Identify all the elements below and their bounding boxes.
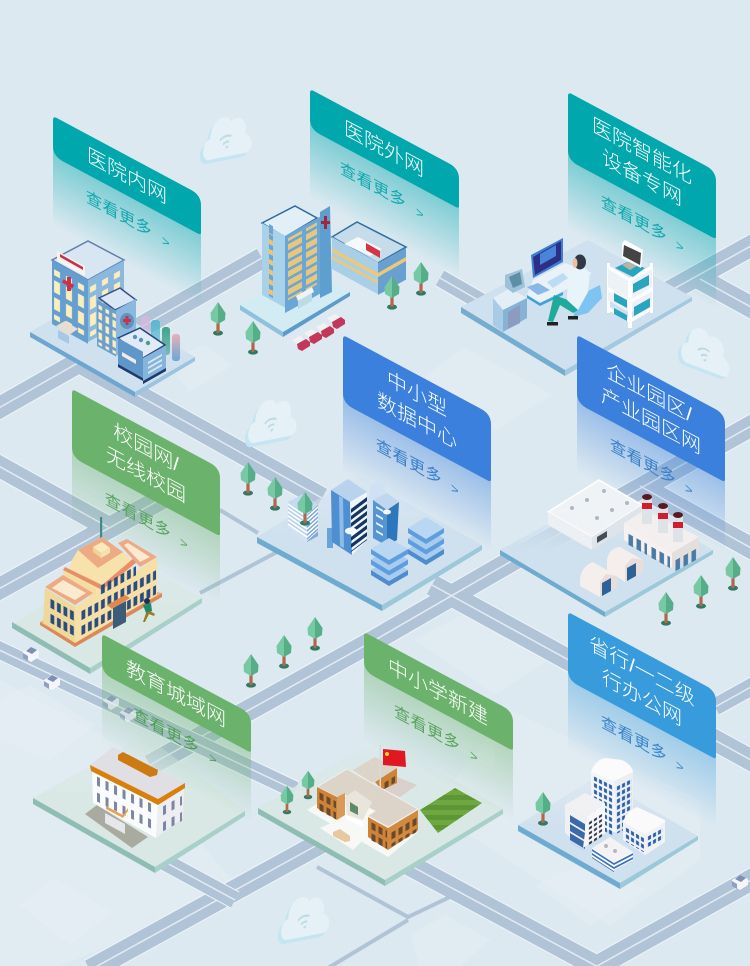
white base xyxy=(307,790,418,857)
tree xyxy=(298,492,312,526)
platform: new school xyxy=(258,737,503,886)
roof xyxy=(90,747,185,805)
mid tower xyxy=(373,493,399,546)
label card: 企业园区/产业园区网 xyxy=(577,335,725,552)
tree xyxy=(244,654,258,688)
bus xyxy=(333,829,350,842)
tree xyxy=(308,617,322,651)
tree xyxy=(384,276,400,310)
icon: wifi cloud xyxy=(278,889,329,949)
ground xyxy=(85,805,148,848)
upper storeys xyxy=(63,537,137,605)
tree xyxy=(414,262,428,296)
striped building xyxy=(288,494,318,542)
right wing walls xyxy=(368,810,418,850)
tree xyxy=(210,302,226,336)
label card: 企业园区/产业园区网: 企业园区/ xyxy=(606,359,692,427)
label card: 中小学新建 xyxy=(364,632,513,822)
illustration: hospital WAN xyxy=(262,206,406,351)
label card: 医院智能化设备专网 xyxy=(568,92,716,309)
tree xyxy=(302,771,314,799)
label card: 中小型数据中心: 查看更多 xyxy=(376,436,442,489)
doctor xyxy=(547,254,590,326)
walls xyxy=(92,770,184,838)
label card: 医院内网 xyxy=(53,116,201,305)
label card: 医院智能化设备专网: 医院智能化 xyxy=(592,113,692,189)
tree xyxy=(726,557,740,591)
label card: 医院外网: 医院外网 xyxy=(344,116,424,182)
left wing walls xyxy=(317,787,345,820)
chimneys xyxy=(642,494,683,542)
city blocks xyxy=(0,345,700,966)
illustration: education bureau building xyxy=(85,747,185,848)
tree xyxy=(694,575,708,609)
label card: 中小学新建: > xyxy=(470,747,478,766)
monitor xyxy=(531,238,563,278)
main roof xyxy=(317,769,418,827)
football field xyxy=(420,788,482,833)
car xyxy=(23,647,39,662)
porch xyxy=(105,806,128,834)
label card: 企业园区/产业园区网: > xyxy=(685,480,693,499)
student xyxy=(143,598,155,622)
roads xyxy=(0,241,750,966)
low block xyxy=(592,837,633,872)
label card: 中小型数据中心: > xyxy=(451,480,459,499)
label card: 教育城域网: 教育城域网 xyxy=(126,656,226,732)
sheds xyxy=(580,547,643,597)
cabinet xyxy=(493,269,527,332)
car xyxy=(732,875,748,890)
label card: 省行/一二级行办公网 xyxy=(568,612,716,829)
label card: 中小型数据中心: 中小型 xyxy=(387,367,447,421)
label card: 中小型数据中心: 数据中心 xyxy=(377,388,457,454)
illustration: bank offices xyxy=(565,758,665,872)
flag xyxy=(380,745,406,791)
label card: 医院智能化设备专网: 查看更多 xyxy=(601,193,667,246)
illustration: enterprise park xyxy=(548,480,699,597)
icon: wifi cloud xyxy=(245,392,296,452)
icon: wifi cloud xyxy=(200,109,251,169)
tree xyxy=(281,786,293,814)
label card: 医院内网: > xyxy=(162,232,170,251)
low block xyxy=(118,328,166,384)
clouds xyxy=(200,109,729,949)
factory xyxy=(624,510,699,574)
ground strip xyxy=(40,592,162,647)
warehouse xyxy=(548,480,642,550)
low emergency building xyxy=(332,222,406,295)
label card: 医院智能化设备专网: > xyxy=(676,237,684,256)
main tower xyxy=(52,241,124,344)
label card: 校园网/无线校园: 无线校园 xyxy=(106,442,186,508)
car xyxy=(44,675,60,690)
left block xyxy=(565,793,605,851)
tree xyxy=(536,792,550,826)
tree xyxy=(240,462,256,496)
label card: 省行/一二级行办公网: 查看更多 xyxy=(601,713,667,766)
label card: 中小学新建: 查看更多 xyxy=(394,702,460,755)
illustration: new school xyxy=(307,745,482,857)
illustration: medical workstation xyxy=(493,238,653,332)
platform: enterprise park xyxy=(500,490,713,617)
car xyxy=(103,695,119,710)
tree xyxy=(276,635,292,669)
desk xyxy=(527,263,592,306)
server stack right xyxy=(408,517,444,565)
platform: campus xyxy=(12,553,202,674)
pale rear block xyxy=(370,481,385,505)
label card: 医院内网: 查看更多 xyxy=(86,188,152,241)
label card: 教育城域网: > xyxy=(209,749,217,768)
platform: hospital WAN xyxy=(240,268,350,337)
label card: 医院外网: 查看更多 xyxy=(340,159,406,212)
coloured pillars xyxy=(141,316,180,361)
right block xyxy=(623,807,665,855)
tree xyxy=(658,592,674,626)
antenna xyxy=(100,517,102,545)
platform: data centre xyxy=(257,475,482,611)
platform: hospital LAN xyxy=(30,297,195,397)
illustration: data centre xyxy=(288,479,444,586)
label card: 教育城域网 xyxy=(102,634,251,824)
entrance xyxy=(107,595,130,629)
label card: 校园网/无线校园: 校园网/ xyxy=(113,419,179,477)
label card: 医院智能化设备专网: 设备专网 xyxy=(602,145,682,211)
server stack left xyxy=(371,538,408,586)
portico xyxy=(345,790,372,827)
label card: 企业园区/产业园区网: 查看更多 xyxy=(610,436,676,489)
illustration: hospital LAN buildings xyxy=(52,241,180,384)
cross tower xyxy=(320,206,332,298)
label card: 校园网/无线校园: 查看更多 xyxy=(105,490,171,543)
illustration: campus building xyxy=(40,517,162,647)
tree xyxy=(268,477,282,511)
label card: 企业园区/产业园区网: 产业园区网 xyxy=(601,383,701,459)
icon: wifi cloud xyxy=(678,322,729,382)
left wing roof xyxy=(45,575,93,605)
back tower xyxy=(591,758,633,837)
equipment shelf xyxy=(607,240,653,328)
label card: 校园网/无线校园 xyxy=(72,389,220,606)
label card: 医院外网: > xyxy=(416,204,424,223)
label card: 校园网/无线校园: > xyxy=(180,534,188,553)
label card: 中小型数据中心 xyxy=(343,335,491,552)
main tower xyxy=(327,479,367,555)
chair xyxy=(573,285,602,317)
platform: education metro xyxy=(33,735,245,873)
label card: 中小学新建: 中小学新建 xyxy=(388,654,488,730)
label card: 省行/一二级行办公网: > xyxy=(676,757,684,776)
label card: 省行/一二级行办公网: 行办公网 xyxy=(602,665,682,731)
platform: hospital devices xyxy=(461,240,692,376)
mid block xyxy=(97,288,136,356)
trees xyxy=(210,262,740,826)
label card: 医院内网: 医院内网 xyxy=(87,143,167,209)
rear wing xyxy=(353,757,417,797)
ambulances xyxy=(292,314,345,351)
platform: bank office xyxy=(518,777,698,889)
right wing roof xyxy=(118,539,157,567)
walls xyxy=(43,557,157,643)
main tower xyxy=(262,206,320,313)
label card: 教育城域网: 查看更多 xyxy=(133,705,199,758)
cars xyxy=(23,647,748,890)
label card: 医院外网 xyxy=(310,89,459,279)
tree xyxy=(246,321,260,355)
label card: 省行/一二级行办公网: 省行/一二级 xyxy=(589,632,695,710)
car xyxy=(120,707,136,722)
